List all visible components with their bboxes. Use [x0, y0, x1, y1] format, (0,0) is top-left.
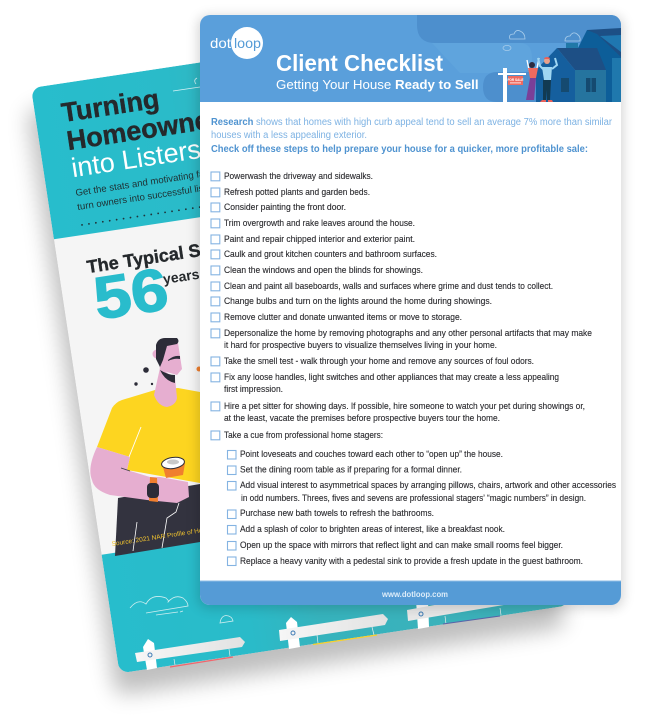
back sheet title: Turning: [59, 84, 161, 128]
checklist: main steps: Change bulbs and turn on the lights around the home during showings.: [224, 296, 492, 306]
head: [158, 343, 182, 375]
typical seller heading: The Typical Seller: [85, 235, 238, 277]
checklist: home staging sub-steps: [228, 449, 616, 566]
checklist: home staging sub-steps: Replace a heavy vanity with a pedestal sink to provide a fresh update in the guest bathroom.: [240, 556, 583, 566]
illustration: for sale sign: FOR SALE: [507, 78, 524, 82]
logo: dotloop: [210, 27, 263, 59]
back sheet title: into Listers: [69, 134, 203, 183]
panel: client checklist sheet: [200, 15, 621, 605]
source note: Source: 2021 NAR Profile of Home Buyers and Sellers: [111, 517, 268, 548]
footer bar: [200, 580, 621, 605]
checklist: main steps: first impression.: [224, 384, 283, 394]
t-shirt: [97, 388, 200, 483]
checklist: main steps: Hire a pet sitter for showing days. If possible, hire someone to watch your pet during showings or,: [224, 401, 585, 411]
checklist: main steps: Refresh potted plants and garden beds.: [224, 187, 370, 197]
logo: dotloop: loop: [234, 35, 261, 51]
intro text: houses with a less appealing exterior.: [211, 130, 367, 141]
checklist: main steps: Trim overgrowth and rake leaves around the house.: [224, 218, 415, 228]
checklist: main steps: [211, 171, 592, 440]
illustration: man with coffee: [90, 338, 202, 556]
trousers: [115, 484, 200, 556]
top cloud decoration: [173, 78, 200, 91]
checklist: main steps: Remove clutter and donate unwanted items or move to storage.: [224, 312, 462, 322]
back sheet shadow: [27, 42, 565, 695]
checklist: main steps: Clean the windows and open the blinds for showings.: [224, 265, 423, 275]
watch: [147, 477, 159, 502]
checklist: main steps: Take the smell test - walk through your home and remove any sources of foul odors.: [224, 356, 534, 366]
illustration: for sale sign: [498, 68, 526, 102]
intro text: [211, 117, 613, 155]
back sheet title: Homeowners: [65, 101, 237, 156]
checklist: main steps: Consider painting the front door.: [224, 202, 346, 212]
checklist: home staging sub-steps: Set the dining room table as if preparing for a formal dinner.: [240, 464, 462, 474]
statistic: 56 years old: [89, 246, 230, 333]
checklist: home staging sub-steps: Add a splash of color to brighten areas of interest, like a breakfast nook.: [240, 524, 505, 534]
checklist: main steps: it hard for prospective buyers to visualize themselves living in your home.: [224, 340, 497, 350]
checklist: home staging sub-steps: Purchase new bath towels to refresh the bathrooms.: [240, 508, 434, 518]
logo: dotloop: dot: [210, 35, 231, 51]
checklist: main steps: Clean and paint all baseboards, walls and surfaces where grime and dust tends to collect.: [224, 281, 553, 291]
neck: [154, 368, 177, 407]
intro text: Research shows that homes with high curb appeal tend to sell an average 7% more than similar: [211, 117, 613, 128]
front sheet shadow: [198, 16, 623, 608]
dotted divider: [82, 202, 230, 225]
back sheet intro text: Get the stats and motivating facts you need to: [75, 159, 269, 199]
subtitle: Getting Your House Ready to Sell: [276, 77, 479, 92]
illustration: houses: [536, 28, 621, 102]
checklist: main steps: at the least, vacate the premises before prospective buyers tour the home.: [224, 413, 500, 423]
statistic: 56 years old: 56: [89, 255, 173, 333]
bottom cloud decoration: [130, 596, 233, 623]
checklist: main steps: Fix any loose handles, light switches and other appliances that may create a less appealing: [224, 372, 559, 382]
illustration: couple celebrating: [526, 57, 557, 102]
illustration: clouds: [503, 30, 580, 51]
checklist: home staging sub-steps: Add visual interest to asymmetrical spaces by arranging pillows, chairs, artwork and other accessories: [240, 480, 616, 490]
back sheet intro text: turn owners into successful listers.: [77, 180, 223, 213]
checklist: home staging sub-steps: Point loveseats and couches toward each other to “open up” the house.: [240, 449, 503, 459]
checklist: home staging sub-steps: in odd numbers. Threes, fives and sevens are professional stagers’ “magic numbers” in design.: [241, 493, 586, 503]
header banner: [200, 15, 621, 102]
title: Client Checklist: [276, 50, 443, 76]
checklist: main steps: Paint and repair chipped interior and exterior paint.: [224, 234, 415, 244]
statistic: 56 years old: years old: [162, 262, 225, 287]
back sheet title: [59, 73, 241, 183]
white fence: [135, 600, 510, 670]
checklist: main steps: Depersonalize the home by removing photographs and any other personal artifacts that may make: [224, 328, 592, 338]
checklist: main steps: Take a cue from professional home stagers:: [224, 430, 383, 440]
arm: [90, 447, 189, 503]
checklist: home staging sub-steps: Open up the space with mirrors that reflect light and can make small rooms feel bigger.: [240, 540, 563, 550]
panel: back infographic sheet: [31, 20, 569, 673]
intro text: Check off these steps to help prepare your house for a quicker, more profitable sale:: [211, 144, 588, 155]
checklist: main steps: Powerwash the driveway and sidewalks.: [224, 171, 373, 181]
footer bar: www.dotloop.com: [381, 589, 448, 599]
coffee cup: [161, 456, 185, 478]
checklist: main steps: Caulk and grout kitchen counters and bathroom surfaces.: [224, 249, 437, 259]
